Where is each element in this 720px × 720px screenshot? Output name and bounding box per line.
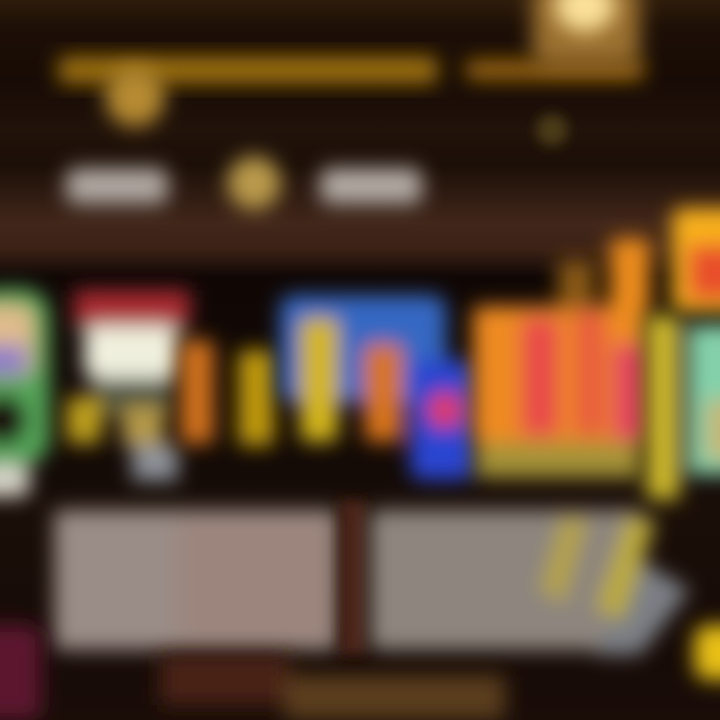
bar chart: orange and yellow bars [180, 340, 274, 446]
divider post [340, 500, 366, 655]
panel: bottom right table [370, 510, 690, 655]
panel: bottom left table [54, 510, 338, 650]
panel: blue bar chart [280, 295, 474, 480]
sub-heading row [66, 156, 422, 210]
panel: teal column and yellow axis [646, 315, 720, 500]
panel: red and white card [66, 290, 190, 481]
ceiling lamps [105, 0, 640, 146]
floor and accents [0, 625, 720, 720]
title banner [58, 56, 645, 84]
panel: left ring chart [0, 288, 50, 497]
bar chart: rising orange and red columns [473, 208, 720, 478]
